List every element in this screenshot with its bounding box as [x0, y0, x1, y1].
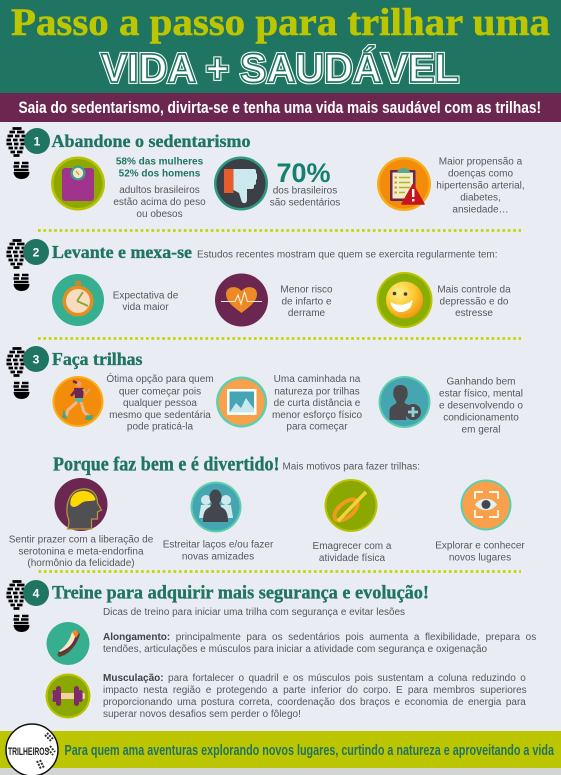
text: pleasure: Sentir prazer com a liberação de: [9, 534, 154, 546]
icon: footprints 2: [6, 240, 30, 291]
text: great option: mesmo que sedentária: [109, 410, 211, 421]
number badge 3: 3: [33, 352, 40, 366]
text: overweight statistics: adultos brasileiros: [119, 185, 200, 196]
section 4: [6, 580, 536, 720]
text: life expectancy: Expectativa de: [113, 290, 179, 302]
section 3: [6, 346, 523, 436]
text: nature walk: Uma caminhada na: [274, 374, 361, 385]
text: explore: Explorar e conhecer: [435, 540, 525, 552]
icon: smiley: [376, 272, 432, 328]
text: nature walk: para começar: [286, 422, 348, 432]
title line 2: VIDA + SAUDÁVEL: [101, 45, 459, 91]
text: overweight statistics: 58% das mulheres: [116, 156, 204, 168]
icon: person with plus: [378, 376, 430, 428]
text: nature walk: de curta distância e: [274, 398, 361, 409]
subtitle band: [0, 93, 561, 122]
heading 4: Treine para adquirir mais segurança e evolução!: [52, 582, 429, 604]
text: great option: qualquer pessoa: [123, 398, 197, 409]
heading 2: Levante e mexa-se: [52, 242, 192, 262]
header banner: [0, 0, 561, 93]
icon: brain head: [54, 478, 108, 531]
icon: runner: [52, 376, 104, 427]
text: disease propensity: hipertensão arterial,: [436, 180, 525, 192]
text: disease propensity: Maior propensão a: [439, 156, 523, 168]
number badge 1: 1: [34, 134, 41, 148]
icon: stopwatch: [52, 274, 104, 326]
icon: footprints 4: [6, 582, 30, 632]
text: sedentary Brazilians: dos brasileiros: [273, 186, 337, 196]
text: great option: pode praticá-la: [127, 422, 194, 432]
icon: scale: [51, 156, 105, 210]
text: fitness gain: estar físico, mental: [439, 388, 523, 400]
icon: clipboard with warning: [377, 157, 431, 211]
text: sedentary Brazilians: são sedentários: [270, 198, 340, 208]
text: depression control: estresse: [455, 308, 493, 319]
text: strength training: superar novos desafios sem perder o fôlego!: [103, 709, 301, 720]
icon: footprints 3: [6, 348, 30, 399]
text: overweight statistics: estão acima do peso: [113, 197, 206, 208]
number badge 4: [23, 580, 49, 606]
text: fitness gain: condicionamento: [443, 412, 519, 424]
text: strength training: Musculação: para fortalecer o quadril e os músculos pois sustentam a coluna reduzindo o: [103, 673, 526, 684]
text: intro 2: Estudos recentes mostram que quem se exercita regularmente tem:: [197, 250, 498, 260]
logo: Trilheiros: [6, 724, 58, 775]
text: strength training: impacto nesta região e protegendo a parte inferior do corpo. E para membros superiores: [103, 685, 527, 696]
text: lower risk: de infarto e: [281, 296, 332, 308]
text: disease propensity: ansiedade…: [452, 204, 509, 216]
text: pleasure: serotonina e meta-endorfina: [18, 546, 144, 558]
text: stretching: Alongamento: principalmente para os sedentários pois aumenta a flexibilidade, prepara os: [103, 632, 536, 643]
section: more reasons: [9, 454, 525, 569]
text: intro more reasons: Mais motivos para fazer trilhas:: [282, 462, 420, 472]
icon: footprints 1: [6, 128, 30, 179]
text: lower risk: derrame: [288, 308, 326, 319]
title line 2: VIDA + SAUDÁVEL: [101, 45, 459, 91]
icon: measuring tape: [324, 479, 378, 532]
text: nature walk: natureza por trilhas: [274, 386, 360, 398]
text: friendships: Estreitar laços e/ou fazer: [163, 540, 274, 550]
statistic: 70%: 70%: [276, 158, 331, 188]
text: explore: novos lugares: [449, 552, 511, 564]
text: intro 4: Dicas de treino para iniciar uma trilha com segurança e evitar lesões: [103, 607, 405, 618]
number badge 2: 2: [33, 246, 40, 260]
text: great option: quer começar pois: [119, 386, 201, 398]
icon: sneaker: [46, 622, 90, 665]
text: depression control: Mais controle da: [437, 284, 511, 296]
text: depression control: depressão e do: [440, 296, 509, 308]
text: stretching: tendões, articulações e músculos para iniciar a atividade com segurança e oxigenação: [103, 644, 488, 655]
text: fitness gain: Ganhando bem: [447, 376, 515, 388]
text: pleasure: (hormônio da felicidade): [27, 558, 135, 569]
heading 3: Faça trilhas: [52, 349, 142, 369]
text: stretching: [103, 632, 536, 655]
text: great option: Ótima opção para quem: [106, 372, 214, 385]
title line 1: Passo a passo para trilhar uma: [11, 1, 550, 44]
text: overweight statistics: 52% dos homens: [119, 168, 201, 180]
heading: porque faz bem: Porque faz bem e é divertido!: [53, 454, 280, 476]
text: fitness gain: em geral: [462, 424, 500, 436]
section 2: [6, 239, 511, 328]
text: friendships: novas amizades: [182, 552, 254, 562]
footer band: [0, 724, 561, 775]
number badge 1: [24, 128, 50, 154]
text: disease propensity: doenças como: [448, 168, 513, 180]
text: disease propensity: diabetes,: [460, 192, 501, 204]
text: fitness gain: e desenvolvendo o: [439, 400, 523, 412]
text: strength training: [103, 673, 527, 720]
number badge 4: 4: [33, 586, 40, 600]
icon: eye in viewfinder: [460, 480, 512, 530]
section 1: [6, 128, 525, 220]
text: life expectancy: vida maior: [122, 302, 169, 313]
icon: group of people: [190, 482, 242, 532]
text: lose weight: Emagrecer com a: [313, 541, 392, 552]
text: overweight statistics: ou obesos: [136, 209, 183, 220]
icon: thumbs down: [214, 156, 268, 210]
logo: Trilheiros: TRILHEIROS: [8, 746, 49, 758]
text: lose weight: atividade física: [319, 553, 386, 564]
text: nature walk: menor esforço físico: [272, 410, 362, 421]
icon: heart pulse: [215, 274, 268, 326]
heading 1: Abandone o sedentarismo: [52, 131, 250, 151]
icon: dumbbell: [46, 674, 90, 718]
number badge 2: [23, 239, 49, 265]
number badge 3: [23, 346, 49, 372]
icon: landscape picture: [216, 376, 267, 428]
text: strength training: proporcionando uma postura correta, coordenação dos braços e economia de energia para: [103, 697, 526, 708]
text: lower risk: Menor risco: [280, 284, 333, 296]
